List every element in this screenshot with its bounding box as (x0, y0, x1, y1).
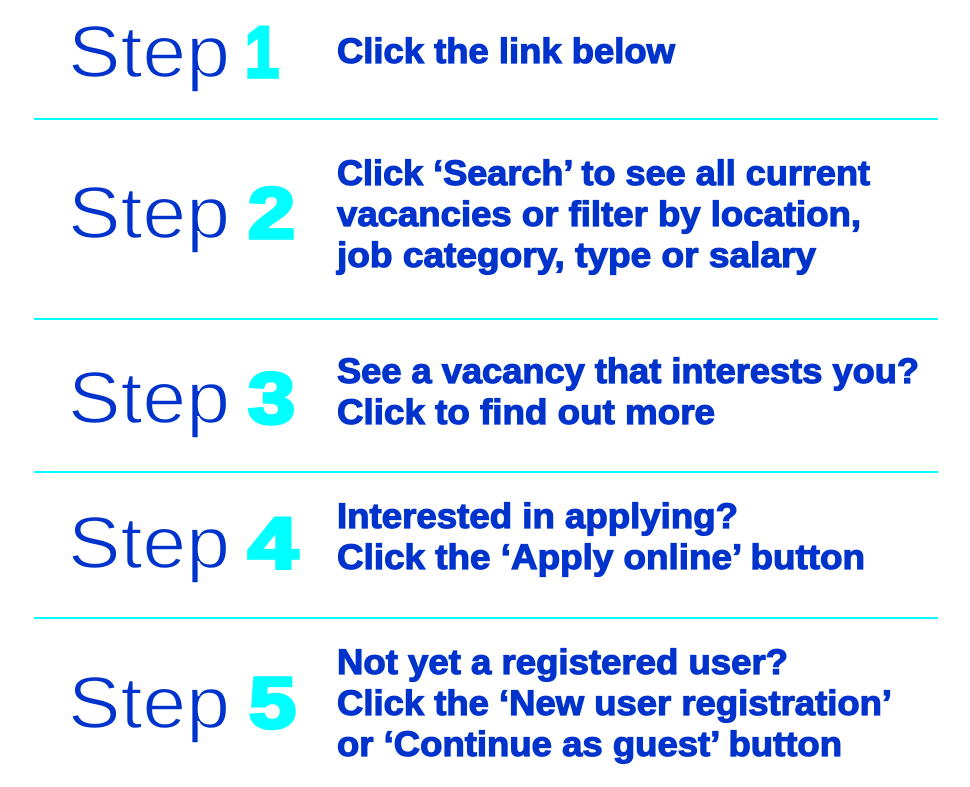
text: step 5 instruction (337, 643, 892, 764)
heading: step 4: Step (68, 503, 230, 584)
heading: step 4 (68, 503, 298, 584)
heading: step 5: Step (68, 663, 230, 744)
panel: step 1 (68, 12, 676, 93)
heading: step 3 (68, 358, 295, 439)
heading: step 2 (68, 173, 295, 254)
text: step 5 instruction: Click the ‘New user registration’ (337, 684, 892, 723)
panel: step 5 (68, 643, 892, 764)
text: step 4 instruction (337, 497, 865, 577)
text: step 3 instruction: Click to find out more (337, 393, 715, 432)
text: step 2 instruction: Click ‘Search’ to see all current (337, 154, 870, 193)
heading: step 2: 2 (248, 174, 295, 254)
heading: step 1: 1 (245, 13, 279, 93)
text: step 2 instruction: job category, type or salary (336, 236, 817, 275)
heading: step 4: 4 (248, 504, 298, 584)
heading: step 2: Step (68, 173, 230, 254)
text: step 3 instruction (337, 352, 919, 432)
text: step 1 instruction: Click the link below (337, 32, 676, 71)
text: step 4 instruction: Interested in applying? (337, 497, 738, 536)
heading: step 1: Step (68, 12, 230, 93)
heading: step 3: Step (68, 358, 230, 439)
text: step 5 instruction: Not yet a registered user? (337, 643, 788, 682)
text: step 3 instruction: See a vacancy that interests you? (337, 352, 919, 391)
text: step 4 instruction: Click the ‘Apply online’ button (337, 538, 865, 577)
heading: step 5 (68, 663, 296, 744)
panel: step 4 (68, 497, 865, 584)
heading: step 3: 3 (248, 359, 295, 439)
text: step 5 instruction: or ‘Continue as guest’ button (337, 725, 842, 764)
text: step 2 instruction (336, 154, 870, 275)
panel: step 2 (68, 154, 870, 275)
panel: step 3 (68, 352, 919, 439)
text: step 2 instruction: vacancies or filter by location, (337, 195, 861, 234)
heading: step 5: 5 (249, 664, 296, 744)
